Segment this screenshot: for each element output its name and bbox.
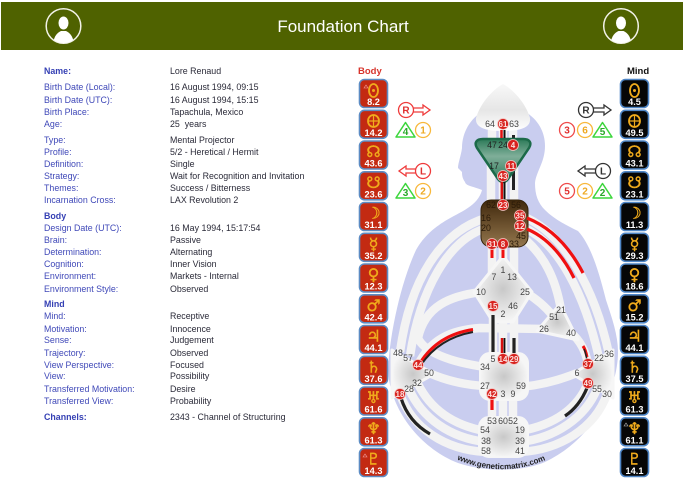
mind planet column: ☿ [630,234,639,253]
gate numbers: 22 [594,353,604,363]
mind planet column: 61.3 [626,404,643,414]
gate numbers: 3 [501,389,506,399]
details: mind section: Mind: [44,310,66,320]
gate numbers: 58 [481,446,491,456]
details: mind section: Possibility [170,371,209,381]
gate numbers: 16 [481,213,491,223]
header bar [1,2,683,50]
website url: www.geneticmatrix.com [458,456,546,470]
body planet column: ☽ [366,204,381,222]
mind planet column: ♅ [627,388,642,407]
gate numbers: 60 [498,416,508,426]
details: design type: Themes: [44,182,78,192]
gate numbers: 46 [508,301,518,311]
activated gates: 37 [584,360,593,369]
gate numbers: 47 [487,140,497,150]
gate numbers: 56 [511,200,521,210]
center: head [476,84,530,131]
center: throat [481,200,528,247]
body right variables: 1 [420,126,426,136]
body planet column: ☿ [369,234,378,253]
gate numbers: 1 [501,265,506,275]
mind right variables: 5 [600,127,606,138]
details: birth data: Tapachula, Mexico [170,106,243,116]
gate numbers: 48 [393,348,403,358]
mind planet column: ♇ [627,450,642,468]
details: birth data: 25 years [170,118,206,128]
gate numbers: 62 [486,200,496,210]
gate numbers [393,119,614,456]
details: design type: Single [170,159,195,169]
details: design type: 5/2 - Heretical / Hermit [170,146,258,156]
body planet column: 35.2 [365,251,382,261]
gate numbers: 64 [485,119,495,129]
body planet column: 14.2 [365,128,382,138]
details: mind section: Motivation: [44,324,87,334]
body planet column: ♃ [366,326,381,346]
gate numbers: 38 [481,436,491,446]
details: design type: Definition: [44,159,83,169]
details: body section: 16 May 1994, 15:17:54 [170,223,260,233]
details: design type [44,134,304,205]
mind planet column: 23.1 [626,189,643,199]
activated gates: 29 [510,355,519,364]
body planet column: ☋ [366,173,381,192]
mind planet column: ♃ [627,326,642,346]
body planet column: 23.6 [365,189,382,199]
details: channels: 2343 - Channel of Structuring [170,412,286,422]
activated gates: 12 [516,222,525,231]
body planet column: ♆ [366,419,381,438]
body planet column: ♇ [366,450,381,468]
details: body section [44,210,260,294]
mind right variables: 3 [564,126,570,136]
gate numbers: 40 [566,328,576,338]
details: body section: Alternating [170,246,212,256]
heading: body column: Body [358,66,382,77]
details: mind section: Observed [170,348,208,358]
details: name [44,66,221,76]
body planet column: 61.3 [365,435,382,445]
details: design type: Mental Projector [170,134,234,144]
details: design type: LAX Revolution 2 [170,195,238,205]
details: design type: Profile: [44,146,72,156]
activated gates: 4 [511,141,516,150]
details: mind section: Focused [170,360,204,370]
mind planet column: 29.3 [626,251,643,261]
mind planet column: 18.6 [626,282,643,292]
arrow: mind right: R [582,106,590,116]
body right variables [396,122,430,138]
details: design type: Strategy: [44,170,79,180]
mind planet column: 44.1 [626,343,643,353]
icon: right avatar [604,9,638,44]
details: design type: Type: [44,134,66,144]
gate numbers: 10 [476,287,486,297]
mind planet column: 37.5 [626,374,643,384]
mind planet column: ☋ [627,173,642,192]
details: mind section: Transferred Motivation: [44,384,135,394]
gate numbers: 45 [516,231,526,241]
body arrows and variables [396,102,430,199]
details: birth data: Birth Date (UTC): [44,94,112,104]
mind planet column: ♆ [627,419,642,438]
details: channels [44,412,286,422]
heading: mind column: Mind [627,66,649,77]
mind planet column: 49.5 [626,128,643,138]
body planet column: ♀ [368,265,379,284]
center: spleen [392,350,434,398]
mind right variables: 6 [582,126,588,136]
gate numbers: 26 [539,324,549,334]
details: body section: Cognition: [44,259,84,269]
activated gates: 43 [499,172,508,181]
gate numbers: 25 [520,287,530,297]
body planet column: ♅ [366,388,381,407]
mind right variables [560,122,612,138]
mind planet column: 4.5 [628,97,641,107]
mind arrows and variables [560,102,612,199]
channels: white network [400,125,609,452]
details: body section: Markets - Internal [170,270,239,280]
body planet column: 12.3 [365,282,382,292]
details: design type: Wait for Recognition and Invitation [170,170,304,180]
gate numbers: 6 [575,368,580,378]
details: birth data: 16 August 1994, 15:15 [170,94,259,104]
activated gates: 49 [584,379,593,388]
arrow: body left: L [420,166,426,178]
activated gates: 23 [499,201,508,210]
details: birth data: Birth Place: [44,106,89,116]
mind planet column: 43.1 [626,158,643,168]
title: Foundation Chart [277,17,409,36]
gate numbers: 55 [592,384,602,394]
mind left variables [560,184,612,199]
details: design type: Incarnation Cross: [44,195,116,205]
gate numbers: 54 [480,425,490,435]
body planet column: 43.6 [365,158,382,168]
gate numbers: 21 [556,305,566,315]
details: body section: Brain: [44,235,67,245]
center: ego [537,304,578,340]
mind planet column: 11.3 [626,220,643,230]
gate numbers: 13 [507,272,517,282]
gate numbers: 51 [549,312,559,322]
details: body section: Observed [170,284,208,294]
body planet column: 37.6 [365,374,382,384]
body left variables: 2 [420,186,426,198]
mind planet column: 15.2 [626,312,643,322]
details: body section: Design Date (UTC): [44,223,122,233]
gate numbers: 39 [515,436,525,446]
body planet column: 14.3 [365,466,382,476]
mind planet column: 61.1 [626,435,643,445]
details: birth data: Birth Date (Local): [44,82,115,92]
activated gates: 14 [499,355,508,364]
details: mind section: Mind [44,299,65,309]
details: birth data: 16 August 1994, 09:15 [170,82,259,92]
details: mind section: Sense: [44,335,72,345]
mind planet column: ☽ [627,204,642,222]
arrow: body right: R [402,106,410,116]
gate numbers: 59 [516,381,526,391]
gate numbers: 7 [492,272,497,282]
body planet column: ☊ [366,142,381,161]
details: mind section: Transferred View: [44,396,113,406]
body planet column: 31.1 [365,220,382,230]
mind left variables: 2 [582,186,588,198]
body planet column: ♄ [366,357,381,376]
details: mind section: Probability [170,396,211,406]
activated gates: 31 [488,240,497,249]
mind planet column: ☊ [627,142,642,161]
details: mind section: Desire [170,384,196,394]
body planet column: 8.2 [367,97,380,107]
body planet column: 42.4 [365,312,383,322]
activated gates: 15 [489,302,498,311]
gate numbers: 41 [515,446,525,456]
details: birth data [44,82,259,129]
gate numbers: 27 [480,381,490,391]
activated channel: gate 4 black line [512,135,515,190]
activated gates [394,118,594,400]
activated gates: 44 [414,361,423,370]
body left variables: 3 [403,188,409,199]
details: mind section: Innocence [170,324,211,334]
details: mind section [44,299,214,406]
mind left variables: 5 [564,186,570,198]
body planet column: 61.6 [365,404,382,414]
details: birth data: Age: [44,118,62,128]
gate numbers: 20 [481,223,491,233]
gate numbers: 34 [480,362,490,372]
gate numbers: 17 [489,161,499,171]
gate numbers: 63 [509,119,519,129]
gate numbers: 5 [491,354,496,364]
body silhouette [388,106,618,470]
gate numbers: 33 [509,239,519,249]
gate numbers: 30 [602,389,612,399]
details: mind section: Receptive [170,310,209,320]
gate numbers: 24 [498,140,508,150]
details: mind section: Judgement [170,335,214,345]
center: g identity [474,256,532,322]
mind planet column [620,80,648,476]
gate numbers: 57 [403,353,413,363]
gate numbers: 19 [515,425,525,435]
center: root [479,417,528,457]
gate numbers: 9 [511,389,516,399]
body left variables [396,184,430,199]
activated channels: red and black [401,130,587,434]
body right variables: 4 [403,127,409,138]
mind planet column: 14.1 [626,466,643,476]
mind planet column: ♂ [627,296,642,315]
gate numbers: 36 [604,349,614,359]
body planet column: ♂ [366,296,381,315]
details: mind section: View Perspective: [44,360,114,370]
center: ajna [476,139,530,182]
details: mind section: Trajectory: [44,348,85,358]
details: body section: Body [44,210,66,220]
details: body section: Passive [170,235,201,245]
arrow: mind left: L [600,166,606,178]
details: body section: Environment: [44,270,96,280]
activated gates: 11 [507,162,516,171]
icon: left avatar [46,9,81,44]
gate numbers: 2 [501,309,506,319]
mind planet column: ♀ [629,265,640,284]
gate numbers: 53 [487,416,497,426]
details: name: Lore Renaud [170,66,221,76]
center: sacral [480,353,528,400]
details: design type: Success / Bitterness [170,182,250,192]
details: channels: Channels: [44,412,87,422]
details: body section: Inner Vision [170,259,217,269]
details: name: Name: [44,66,71,76]
gate numbers: 50 [424,368,434,378]
mind left variables: 2 [600,188,606,199]
activated gates: 18 [396,390,405,399]
activated gates: 42 [488,390,497,399]
gate numbers: 28 [404,384,414,394]
gate numbers: 52 [508,416,518,426]
details: body section: Environment Style: [44,284,118,294]
activated gates: 61 [499,120,508,129]
body planet column: 44.1 [365,343,382,353]
body planet column [360,80,388,476]
mind planet column: ♄ [627,357,642,376]
activated gates: 35 [516,212,525,220]
details: mind section: View: [44,371,65,381]
activated gates: 8 [501,240,506,249]
details: body section: Determination: [44,246,102,256]
gate numbers: 32 [412,378,422,388]
center: solar plexus [572,350,613,398]
